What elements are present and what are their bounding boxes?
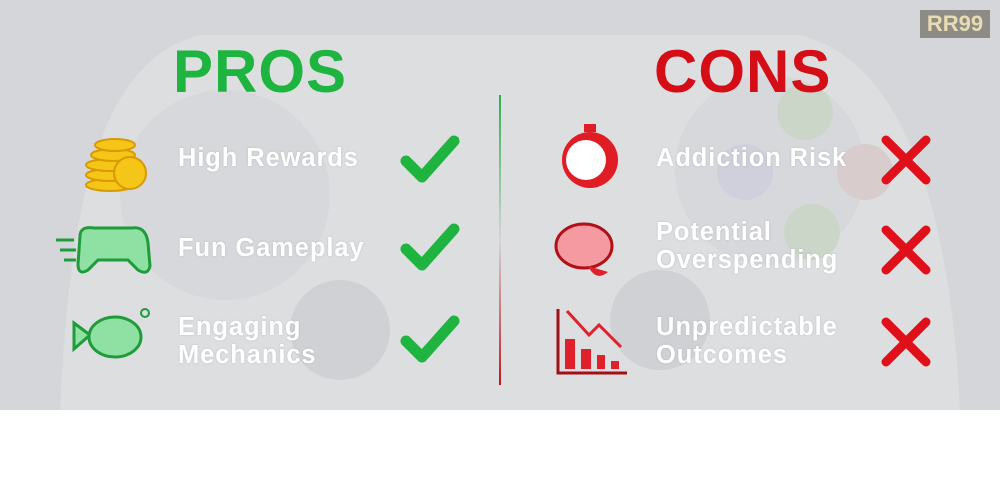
logo: RR99 xyxy=(927,11,983,36)
check 1 xyxy=(400,136,460,182)
text: potential overspending xyxy=(656,218,838,274)
icon: falling chart xyxy=(556,309,627,374)
x 3 xyxy=(882,318,930,366)
text: engaging mechanics: Mechanics xyxy=(178,341,316,369)
heading: cons: CONS xyxy=(654,38,831,105)
text: unpredictable outcomes xyxy=(656,313,838,369)
icon: brain xyxy=(554,222,614,276)
text: high rewards: High Rewards xyxy=(178,144,359,172)
divider xyxy=(499,95,501,385)
text: engaging mechanics xyxy=(178,313,316,369)
heading: pros: PROS xyxy=(173,38,347,105)
icon: stopwatch xyxy=(562,124,618,188)
icon: coins xyxy=(85,138,147,192)
text: engaging mechanics: Engaging xyxy=(178,313,301,341)
text: unpredictable outcomes: Unpredictable xyxy=(656,313,838,341)
check 3 xyxy=(400,316,460,362)
check 2 xyxy=(400,224,460,270)
text: addiction risk: Addiction Risk xyxy=(656,144,847,172)
text: unpredictable outcomes: Outcomes xyxy=(656,341,788,369)
x 2 xyxy=(882,226,930,274)
text: fun gameplay: Fun Gameplay xyxy=(178,234,365,262)
icon: gamepad xyxy=(56,226,152,274)
text: potential overspending: Potential xyxy=(656,218,772,246)
icon: fish xyxy=(72,308,150,358)
text: potential overspending: Overspending xyxy=(656,246,838,274)
x 1 xyxy=(882,136,930,184)
